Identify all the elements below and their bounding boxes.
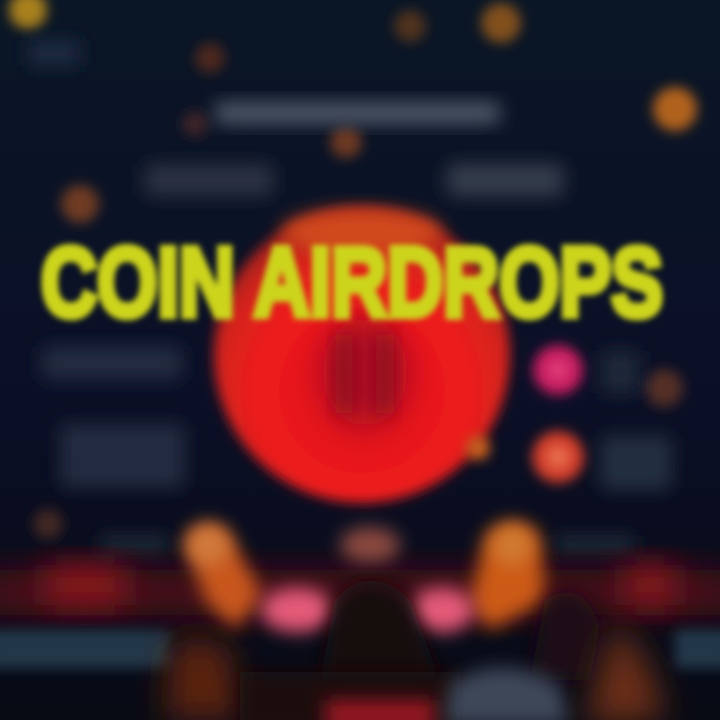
side icons <box>532 345 584 483</box>
crowd with raised arms <box>165 522 665 720</box>
central red coin <box>214 207 510 503</box>
floating coins <box>9 0 697 539</box>
blurred text blocks <box>28 40 672 555</box>
bottom band <box>0 565 720 668</box>
